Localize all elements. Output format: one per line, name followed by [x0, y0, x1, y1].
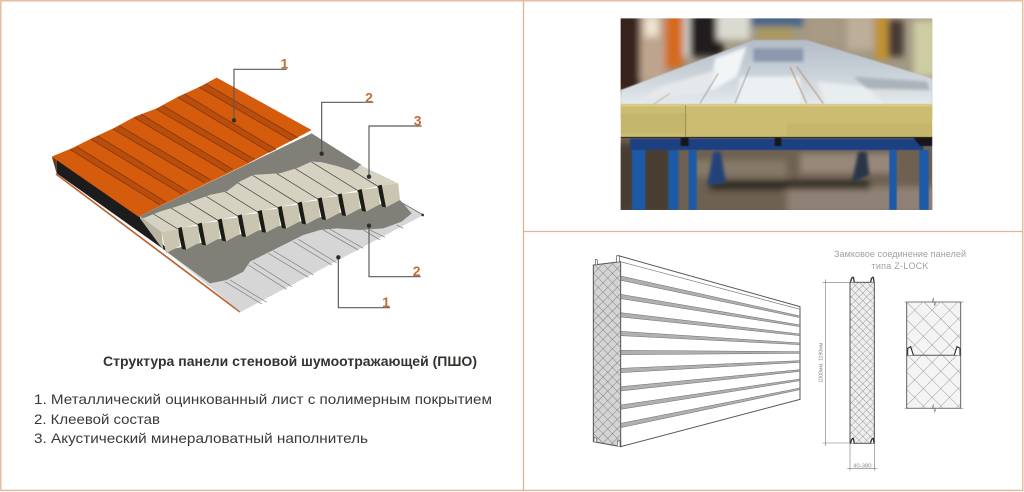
- lower panel: [907, 355, 961, 408]
- callout 1 bottom: [336, 255, 390, 310]
- upper adhesive layer: [138, 133, 362, 218]
- callout 2 top: 2: [365, 89, 373, 105]
- layered panel artwork: [52, 78, 424, 312]
- callout 1 top: 1: [280, 55, 288, 71]
- width dimension: 40-380: [853, 464, 872, 470]
- panel face: [618, 256, 800, 447]
- callout 3: [367, 112, 422, 179]
- mineral wool cross-section: [621, 104, 932, 137]
- section locks: [851, 277, 874, 443]
- outer metal sheet: orange top: [52, 78, 312, 217]
- callout 1 bottom: 1: [382, 294, 390, 310]
- hatched end section: [593, 262, 621, 447]
- callout 2 bottom: 2: [413, 263, 421, 279]
- callout 3: 3: [414, 112, 422, 128]
- panel: technical drawings: [593, 249, 966, 471]
- break lines: [905, 298, 963, 412]
- 3D corrugated panel drawing: [593, 256, 800, 447]
- heading: Структура панели стеновой шумоотражающей (ПШО): [103, 354, 477, 369]
- blurred floor and table legs: [613, 137, 937, 213]
- hatched section: [850, 282, 874, 443]
- callout 2 top: [319, 89, 373, 156]
- lock detail drawing: [905, 298, 963, 412]
- side edge of the panel: [52, 156, 240, 312]
- caption line 1: Замковое соединение панелей: [834, 249, 966, 259]
- panel ribs: [621, 276, 800, 428]
- panel top surface: [621, 40, 932, 104]
- height dimension: 1000мм, 1190мм: [819, 343, 825, 383]
- lock joints: [908, 347, 960, 355]
- end locks: [594, 256, 620, 447]
- lower adhesive layer: [165, 200, 412, 283]
- callout 2 bottom: [367, 223, 421, 279]
- Z-LOCK caption: [834, 249, 966, 271]
- section drawing with dimensions: [819, 277, 877, 471]
- legend item 3: 3. Акустический минераловатный наполнитель: [34, 430, 368, 446]
- blurred workshop background: [613, 13, 937, 118]
- legend item 2: 2. Клеевой состав: [34, 411, 160, 427]
- outer metal sheet: silver underside: [167, 202, 424, 312]
- panel: photo of sandwich panel on a table: [613, 13, 937, 213]
- dimension lines: [823, 279, 877, 471]
- mineral wool filler: [140, 162, 400, 254]
- callout 1 top: [232, 55, 288, 122]
- legend item 1: 1. Металлический оцинкованный лист с полимерным покрытием: [34, 391, 492, 407]
- legend list: [34, 391, 492, 446]
- caption line 2: типа Z-LOCK: [872, 261, 928, 271]
- upper panel: [907, 302, 961, 355]
- panel: layered structure illustration: [52, 55, 424, 312]
